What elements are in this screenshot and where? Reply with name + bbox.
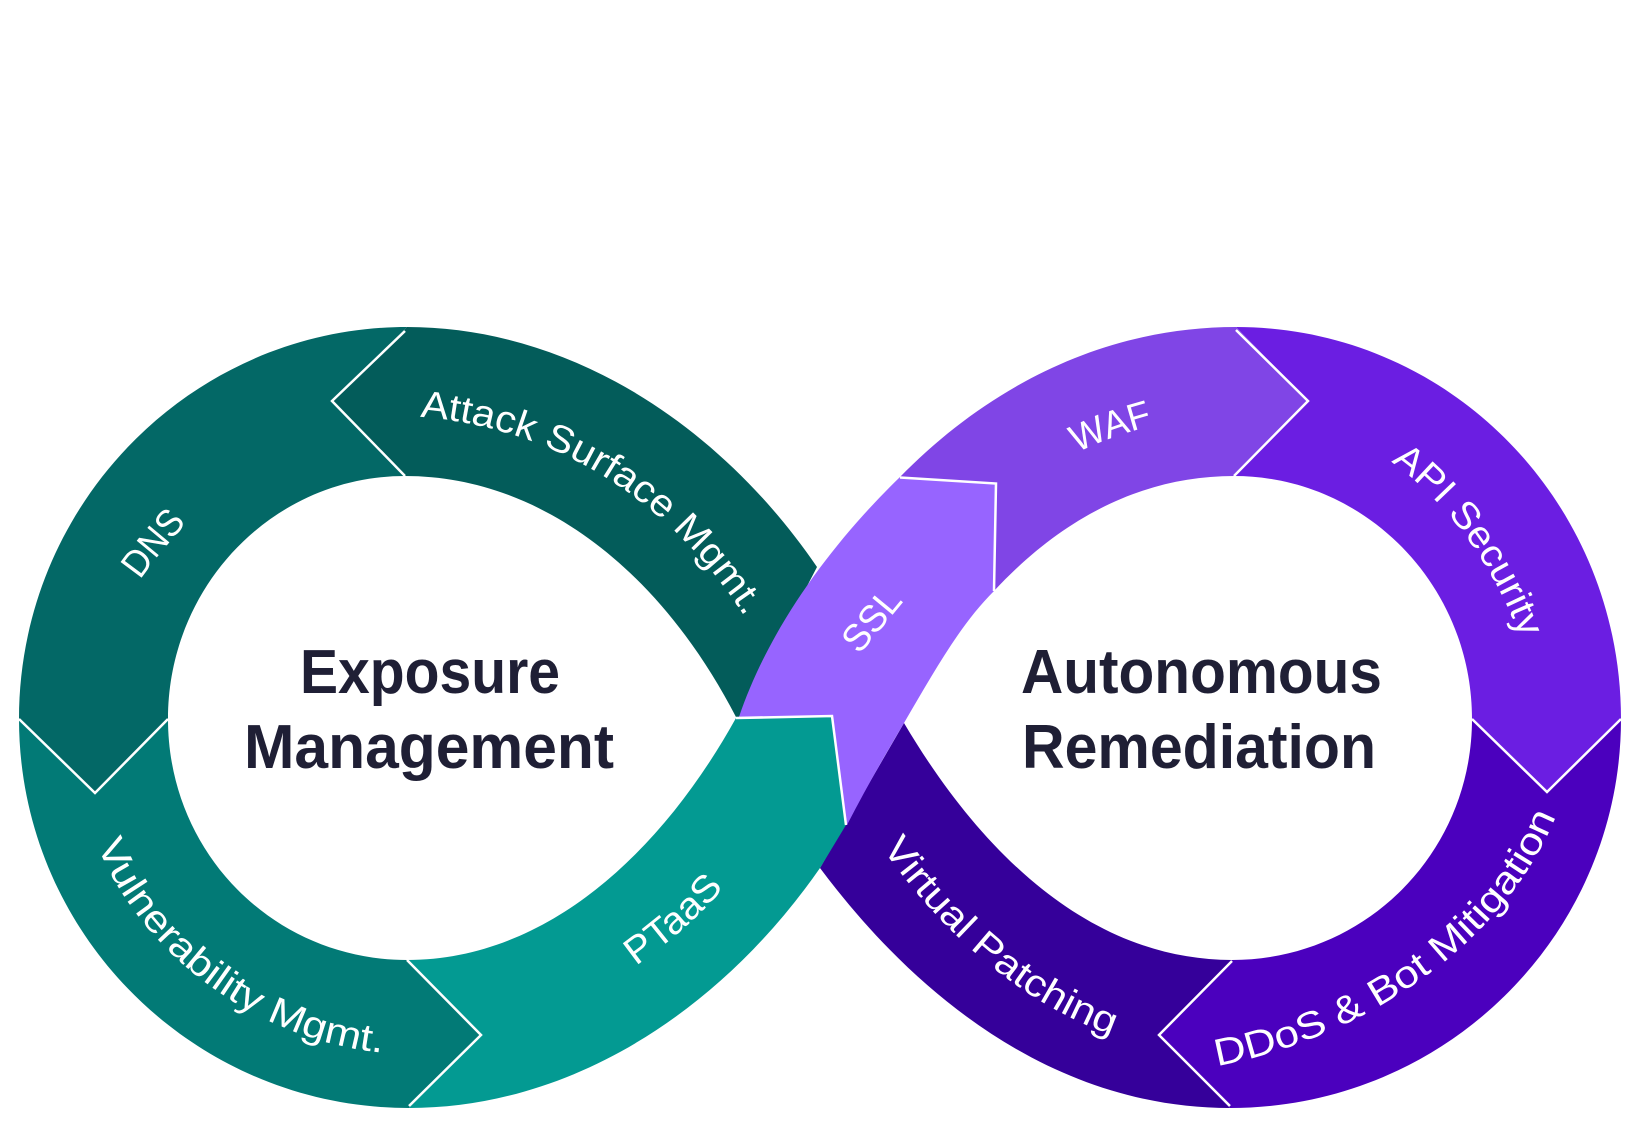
segment: Virtual Patching <box>820 723 1232 1108</box>
segment: DDoS and Bot Mitigation: DDoS & Bot Mitigation <box>1215 812 1555 1066</box>
segment: API Security: API Security <box>1391 448 1540 631</box>
segment: WAF: WAF <box>1066 400 1148 450</box>
segment: DNS <box>19 327 407 792</box>
segment: WAF <box>900 327 1310 590</box>
segment: PTaaS: PTaaS <box>622 874 720 964</box>
heading: Autonomous Remediation <box>1021 638 1382 782</box>
heading: Exposure Management <box>244 638 614 782</box>
segment: API Security <box>1236 327 1621 794</box>
segment: DDoS and Bot Mitigation <box>1157 720 1621 1108</box>
heading: Exposure Management: Exposure <box>300 638 560 707</box>
segment: Vulnerability Mgmt.: Vulnerability Mgmt. <box>102 834 379 1052</box>
segment: DNS: DNS <box>120 510 183 578</box>
segment: Attack Surface Mgmt. <box>334 327 817 717</box>
heading: Autonomous Remediation: Remediation <box>1022 713 1376 782</box>
segment: SSL: SSL <box>844 596 903 651</box>
segment: Attack Surface Mgmt.: Attack Surface Mgmt. <box>420 392 756 614</box>
heading: Exposure Management: Management <box>244 713 614 782</box>
segment: SSL <box>739 476 998 825</box>
segment: Vulnerability Mgmt. <box>19 718 480 1108</box>
segment: Virtual Patching: Virtual Patching <box>889 832 1116 1040</box>
segment: PTaaS <box>406 714 848 1108</box>
heading: Autonomous Remediation: Autonomous <box>1021 638 1382 707</box>
